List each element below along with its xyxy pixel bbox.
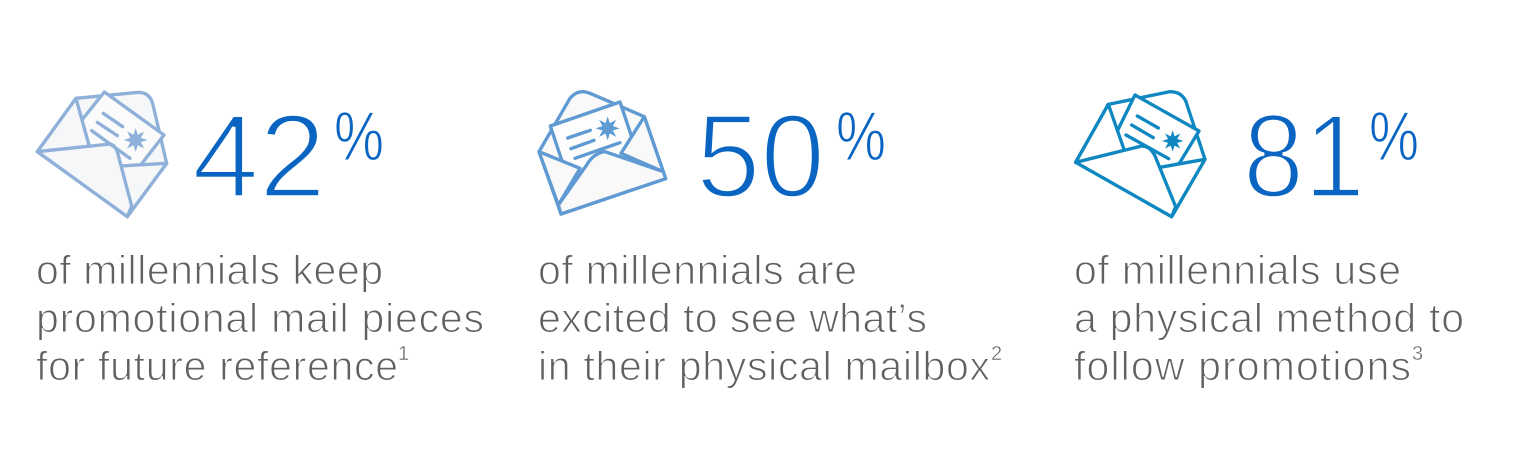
percent sign: % [836,97,886,175]
percent sign: % [1369,97,1419,175]
panel: stat 42 percent [36,90,484,389]
panel: stat 50 percent [538,90,1002,389]
text block: description 2 [538,247,1002,389]
text block: description 3: of millennials use [1074,247,1401,293]
text block: description 2: 2 [991,343,1002,365]
text block: description 3: 3 [1412,343,1423,365]
text block: description 3: follow promotions [1074,343,1411,389]
text block: description 1: for future reference [36,343,398,389]
number: 42: 42 [192,90,326,223]
text block: description 1 [36,247,484,389]
number: 50: 50 [696,90,825,223]
icon: envelope 3 [1076,92,1205,217]
text block: description 3: a physical method to [1074,295,1464,341]
text block: description 1: 1 [398,343,409,365]
icon: envelope 1 [37,92,167,217]
text block: description 2: of millennials are [538,247,857,293]
icon: envelope 2 [539,92,666,214]
panel: stat 81 percent [1074,90,1464,389]
text block: description 2: in their physical mailbox [538,343,990,389]
text block: description 2: excited to see what’s [538,295,927,341]
text block: description 1: of millennials keep [36,247,383,293]
text block: description 3 [1074,247,1464,389]
text block: description 1: promotional mail pieces [36,295,484,341]
percent sign: % [334,97,384,175]
number: 81: 81 [1243,90,1365,223]
